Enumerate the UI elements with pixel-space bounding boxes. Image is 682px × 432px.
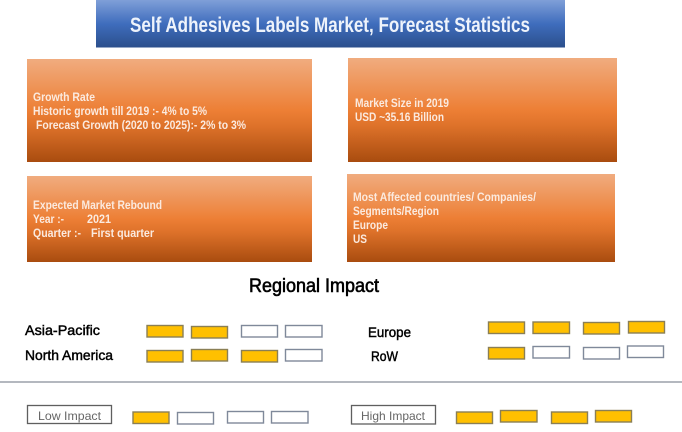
panel: market size: Market Size in 2019 — [355, 98, 449, 110]
title: Self Adhesives Labels Market, Forecast Statistics — [130, 14, 530, 37]
panel: most affected: Most Affected countries/ Companies/ — [353, 192, 537, 204]
row: Europe — [368, 322, 664, 340]
row: RoW: RoW — [371, 348, 399, 364]
row: North America: North America — [25, 347, 113, 363]
panel: expected market rebound: Quarter :- — [33, 228, 81, 240]
panel: expected market rebound: Expected Market Rebound — [33, 200, 162, 212]
legend: low impact — [28, 406, 308, 424]
panel: expected market rebound: First quarter — [91, 228, 154, 240]
row: Europe: Europe — [368, 324, 411, 340]
panel: growth rate: Historic growth till 2019 :- 4% to 5% — [33, 106, 207, 118]
panel: most affected: Europe — [353, 220, 388, 232]
panel: market size: USD ~35.16 Billion — [355, 112, 444, 124]
legend: high impact — [352, 406, 632, 424]
panel: most affected — [347, 174, 615, 262]
row: North America — [25, 347, 322, 363]
heading: regional impact: Regional Impact — [249, 276, 380, 297]
panel: growth rate — [27, 59, 312, 162]
panel: growth rate: Forecast Growth (2020 to 2025):- 2% to 3% — [36, 120, 246, 132]
panel: growth rate: Growth Rate — [33, 92, 95, 104]
panel: expected market rebound — [27, 176, 312, 262]
row: Asia-Pacific: Asia-Pacific — [25, 322, 100, 338]
panel: most affected: US — [353, 234, 367, 246]
legend: low impact: Low Impact — [38, 409, 102, 423]
panel: expected market rebound: Year :- — [33, 214, 64, 226]
panel: most affected: Segments/Region — [353, 206, 439, 218]
row: RoW — [371, 346, 664, 364]
row: Asia-Pacific — [25, 322, 322, 338]
legend: high impact: High Impact — [361, 409, 426, 423]
panel: market size — [348, 58, 617, 162]
panel: expected market rebound: 2021 — [87, 214, 112, 226]
title — [96, 0, 565, 48]
